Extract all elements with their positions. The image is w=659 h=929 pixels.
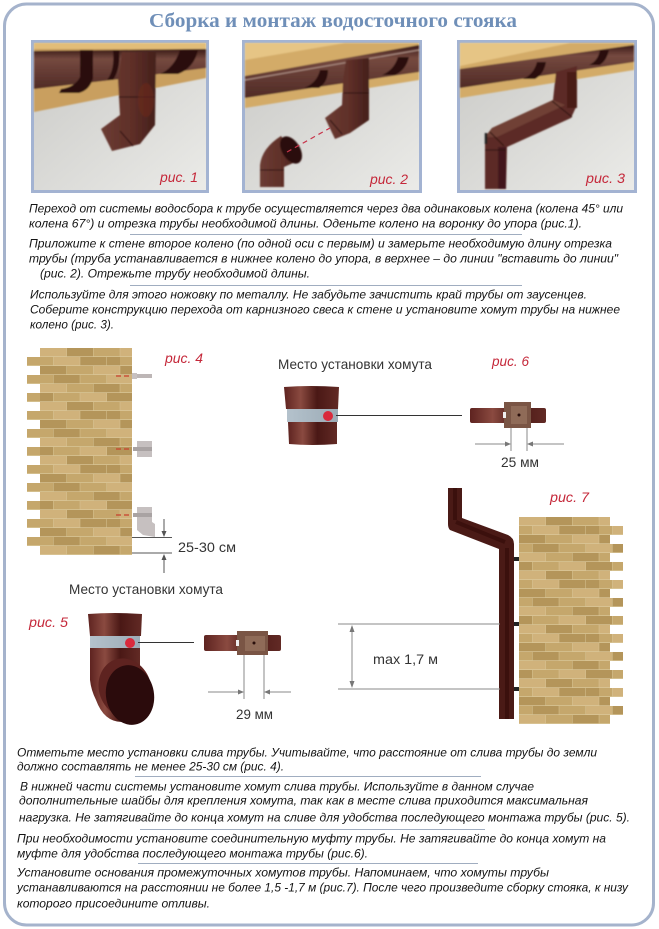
coupling <box>284 386 339 445</box>
photo: figure 1 <box>32 42 208 192</box>
text block: bottom instructions: должно составлять не менее 25-30 см (рис. 4). <box>17 760 284 774</box>
text block: top instructions: трубы (труба устанавливается в нижнее колено до упора, в верхнее – до линии "вставить до линии" <box>29 252 619 266</box>
clamp <box>204 631 281 655</box>
downpipe <box>448 488 514 719</box>
figure 4: brick wall with brackets <box>27 348 236 573</box>
text block: top instructions: Соберите конструкцию перехода от карнизного свеса к стене и установите хомут трубы на нижнее <box>30 302 620 316</box>
dimension 25-30 cm <box>132 519 236 573</box>
text block: bottom instructions: В нижней части системы установите хомут слива трубы. Используйте в данном случае <box>20 780 534 794</box>
heading: clamp location: Место установки хомута <box>278 356 432 372</box>
outlet elbow <box>88 613 160 729</box>
text block: bottom instructions: нагрузка. Не затягивайте до конца хомут на сливе для удобства последующего монтажа трубы (рис. 5). <box>19 810 630 824</box>
label: рис. 4: рис. 4 <box>164 350 203 366</box>
text block: top instructions: Используйте для этого ножовку по металлу. Не забудьте зачистить край трубы от заусенцев. <box>30 288 587 302</box>
bracket top <box>116 373 152 379</box>
text block: bottom instructions: Установите основания промежуточных хомутов трубы. Напоминаем, что хомуты трубы <box>16 866 549 880</box>
text block: bottom instructions: муфте для удобства последующего монтажа трубы (рис.6). <box>17 846 368 860</box>
loose elbow <box>260 133 307 187</box>
dimension max 1.7 m <box>338 624 500 689</box>
brick wall <box>519 517 623 724</box>
text block: bottom instructions: которого присоедините отливы. <box>17 896 210 910</box>
dimension 25 mm: 25 мм <box>501 454 539 470</box>
text block: bottom instructions: устанавливаются на расстоянии не более 1,5 -1,7 м (рис.7). После чего произведите сборку стояка, к низу <box>16 880 629 894</box>
label: рис. 7: рис. 7 <box>549 489 590 505</box>
figure 6: coupling and clamp <box>278 353 564 470</box>
text block: top instructions: Переход от системы водосбора к трубе осуществляется через два одинаковых колена (колена 45° или <box>29 202 623 216</box>
text block: top instructions: колена 67°) и отрезка трубы необходимой длины. Оденьте колено на воронку до упора (рис.1). <box>29 216 582 230</box>
label: рис. 6: рис. 6 <box>491 353 529 369</box>
label: рис. 2: рис. 2 <box>369 171 408 187</box>
text block: bottom instructions <box>16 746 630 910</box>
dimension max 1.7 m: max 1,7 м <box>373 651 438 667</box>
text block: bottom instructions: При необходимости установите соединительную муфту трубы. Не затягивайте до конца хомут на <box>17 832 606 846</box>
text block: top instructions: Приложите к стене второе колено (по одной оси с первым) и замерьте необходимую длину отрезка <box>29 236 612 250</box>
brick wall <box>27 348 132 555</box>
heading: clamp location: Место установки хомута <box>69 581 223 597</box>
bracket middle <box>116 441 152 457</box>
clamp <box>470 402 546 428</box>
dimension 25-30 cm: 25-30 см <box>178 539 236 555</box>
label: рис. 3: рис. 3 <box>585 170 625 186</box>
text block: top instructions: (рис. 2). Отрежьте трубу необходимой длины. <box>40 266 310 280</box>
text block: bottom instructions: дополнительные шайбы для крепления хомута, так как в месте слива приходится максимальная <box>19 794 589 808</box>
figure 5: outlet and clamp <box>28 581 291 729</box>
wall clamps <box>514 557 519 691</box>
photo: figure 3 <box>458 42 636 192</box>
figure 7: downpipe on brick wall <box>338 488 623 724</box>
text block: top instructions <box>29 202 623 332</box>
text block: bottom instructions: Отметьте место установки слива трубы. Учитывайте, что расстояние от слива трубы до земли <box>17 746 597 760</box>
dimension 29 mm <box>208 655 291 722</box>
label: рис. 1: рис. 1 <box>159 169 198 185</box>
dimension 25 mm <box>475 428 564 470</box>
label: рис. 5: рис. 5 <box>28 614 68 630</box>
title: Сборка и монтаж водосточного стояка <box>149 10 517 32</box>
photo: figure 2 <box>244 42 420 192</box>
dimension 29 mm: 29 мм <box>236 706 273 722</box>
text block: top instructions: колено (рис. 3). <box>30 318 114 332</box>
bracket bottom with outlet <box>116 507 155 537</box>
